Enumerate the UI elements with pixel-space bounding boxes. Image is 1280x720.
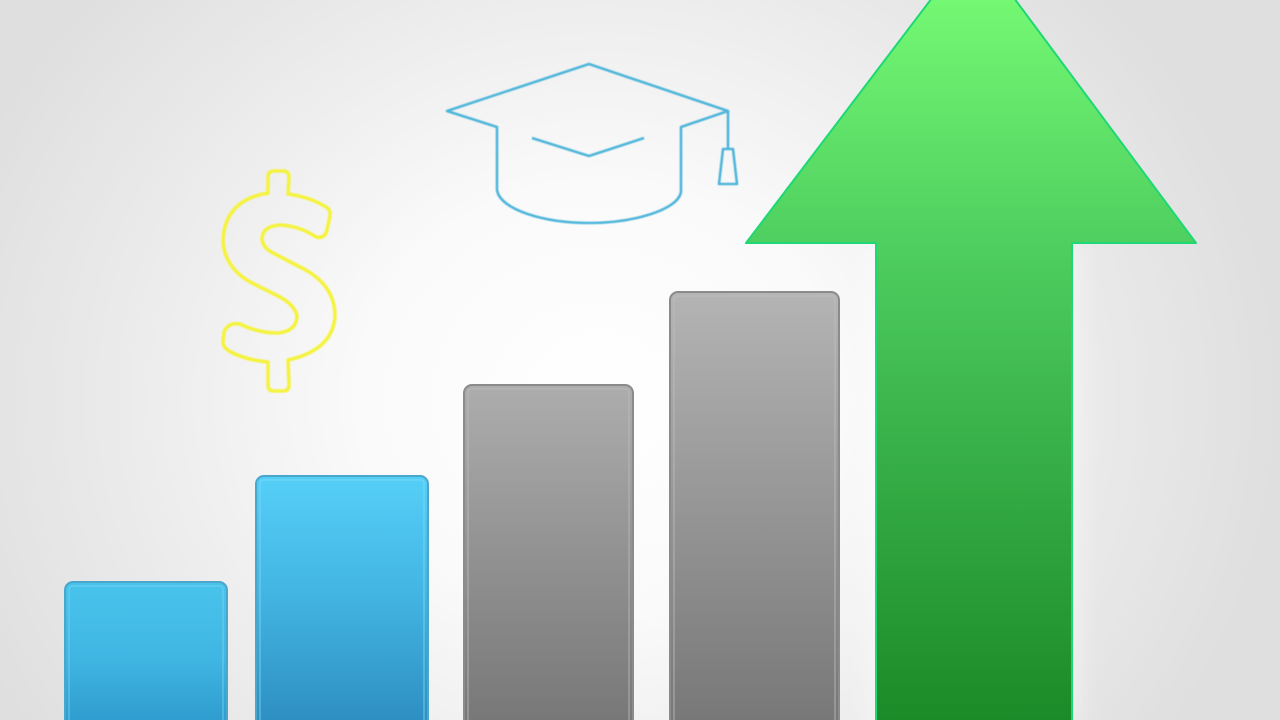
icon: graduation cap	[447, 64, 737, 223]
bar 3: gray	[464, 385, 633, 720]
icon: dollar sign	[223, 171, 335, 391]
bar 4: gray	[670, 292, 839, 720]
bar 2: blue	[256, 476, 428, 720]
bar 1: blue	[65, 582, 227, 720]
arrow halo	[866, 243, 1082, 720]
arrow: growth	[746, 0, 1196, 720]
